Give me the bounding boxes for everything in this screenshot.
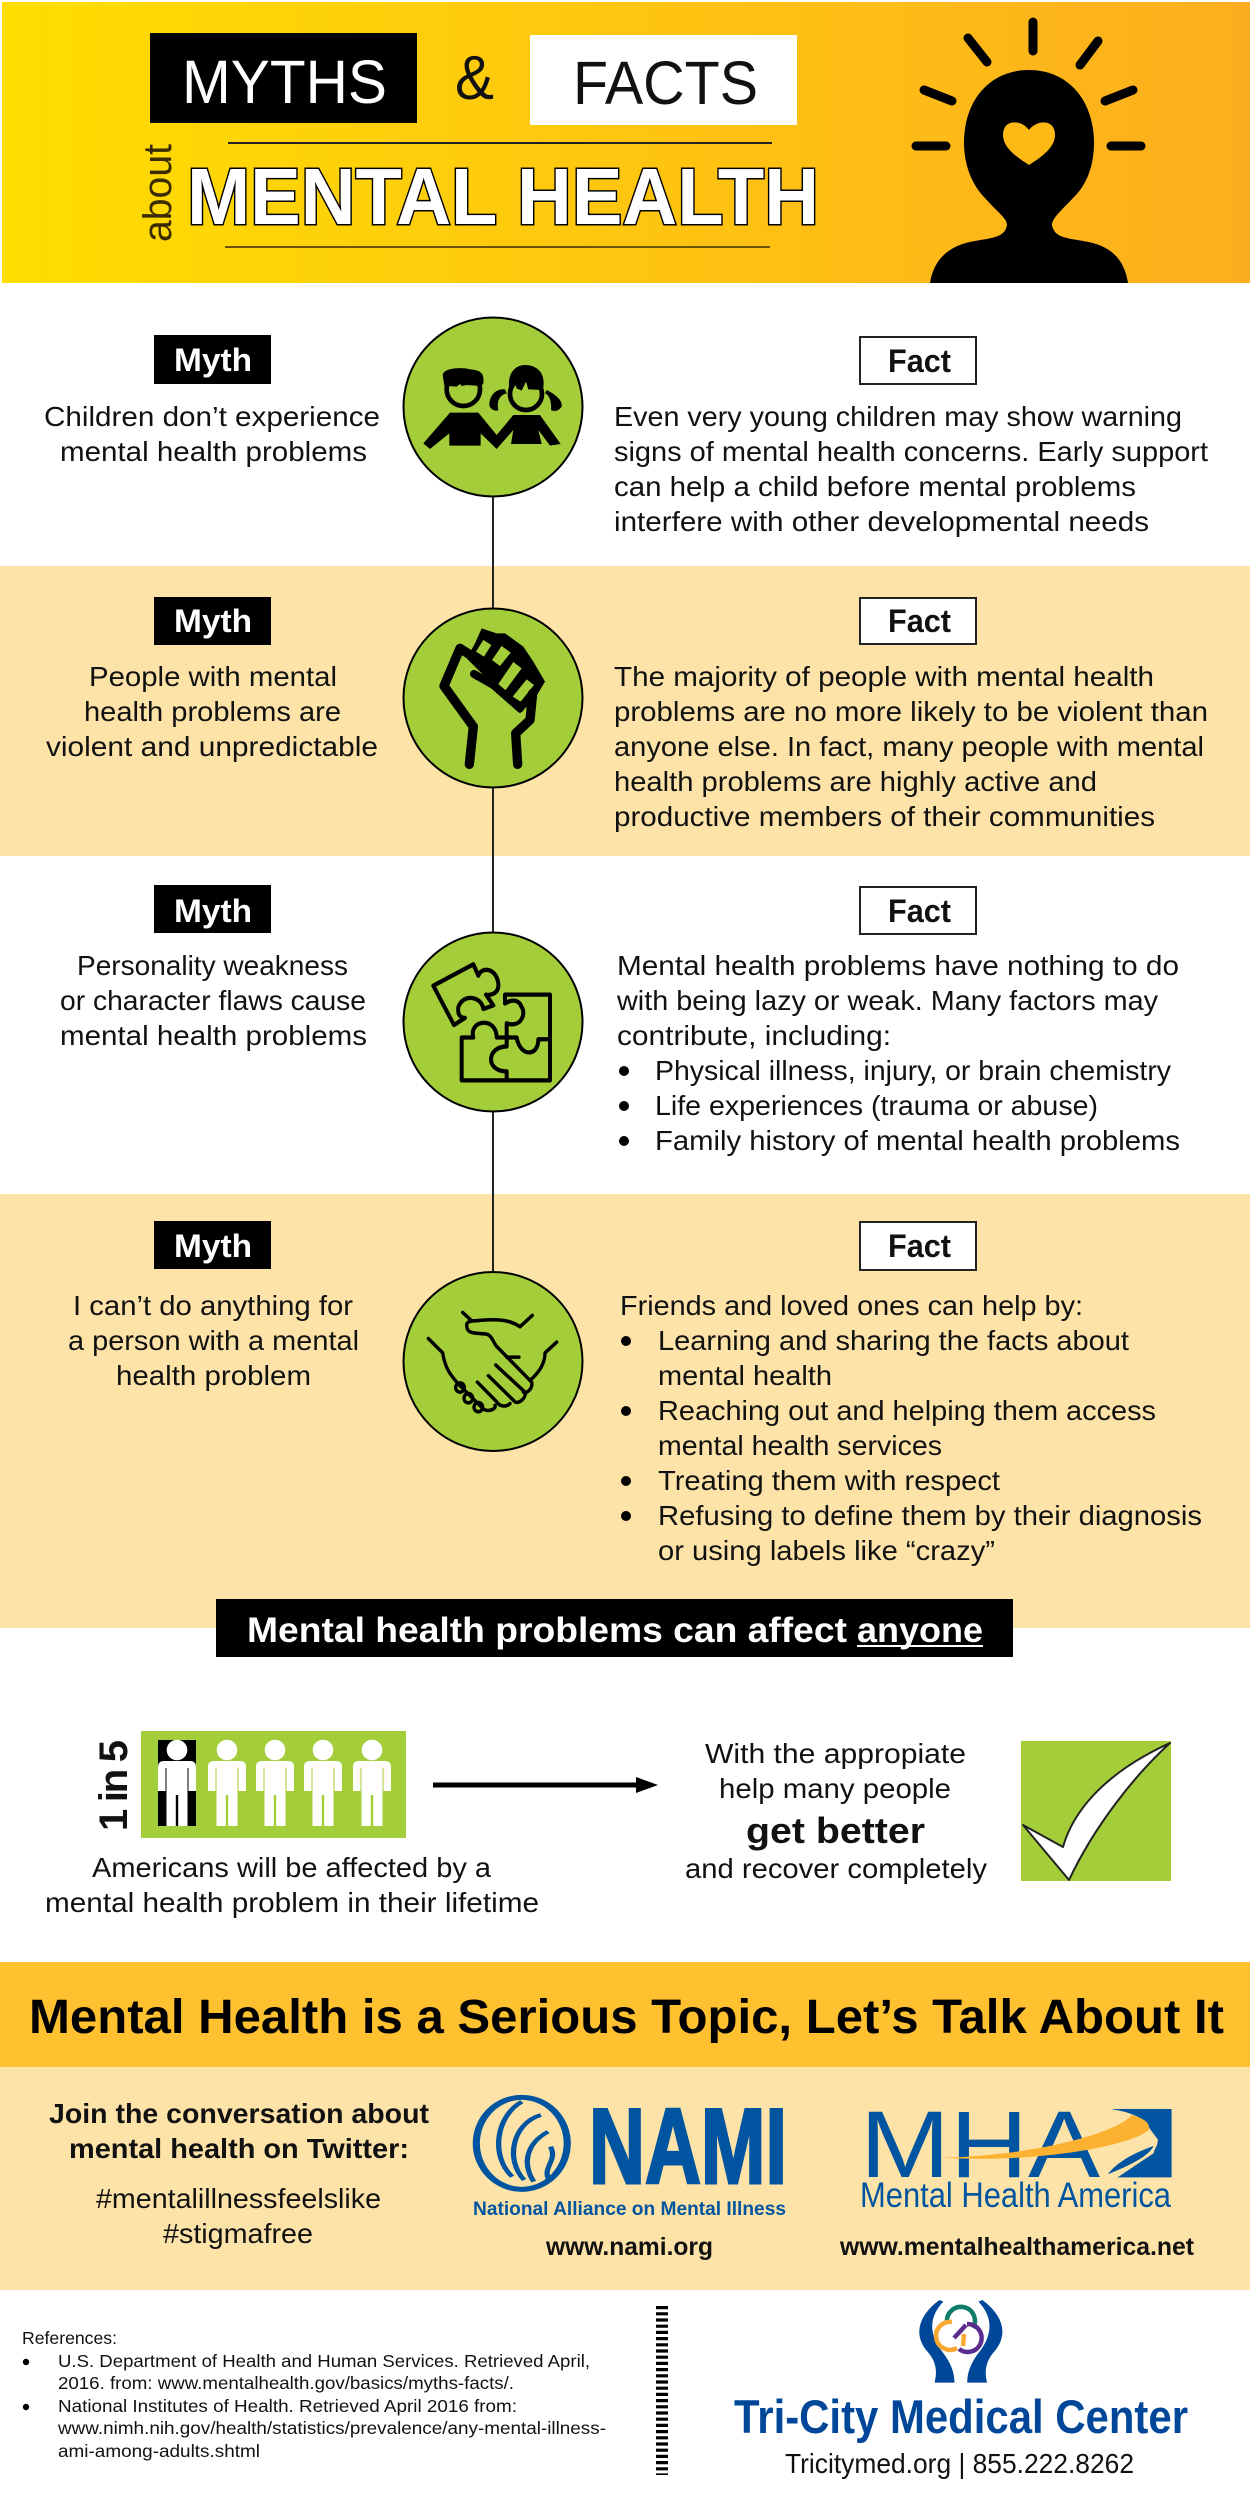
myth tag: Myth	[174, 893, 252, 929]
header panel	[2, 2, 1250, 283]
myths label	[150, 33, 417, 123]
myth text: violent and unpredictable	[46, 731, 378, 762]
myths label: MYTHS	[182, 48, 387, 116]
logo: MHA: MHA	[860, 2092, 1101, 2198]
fact text with bullets: Mental health problems have nothing to do	[617, 950, 1179, 981]
fact text: problems are no more likely to be violent than	[614, 696, 1208, 727]
myth tag	[154, 335, 271, 384]
fact tag	[860, 1222, 976, 1270]
twitter invite text: Join the conversation about	[49, 2098, 429, 2129]
fact text with bullets: with being lazy or weak. Many factors may	[616, 985, 1158, 1016]
myth text	[44, 401, 380, 467]
get better text: With the appropiate	[705, 1738, 966, 1769]
panel: join the conversation	[0, 2067, 1250, 2290]
logo: NAMI	[473, 2086, 787, 2220]
pictogram: 1 in 5 people	[141, 1731, 406, 1838]
hashtags: #mentalillnessfeelslike	[96, 2183, 381, 2214]
1 in 5 rotated label: 1 in 5	[92, 1740, 136, 1831]
fact tag: Fact	[888, 603, 951, 639]
americans caption	[45, 1852, 539, 1918]
fact text	[614, 661, 1208, 832]
timeline connector	[492, 497, 494, 1271]
fact tag	[860, 598, 976, 644]
section heading bar: Mental Health is a Serious Topic, Let’s Talk About It	[29, 1991, 1224, 2044]
myth text	[60, 950, 367, 1051]
panel: myth 2 violence	[0, 566, 1250, 856]
fact text: The majority of people with mental health	[614, 661, 1154, 692]
myth text: or character flaws cause	[60, 985, 366, 1016]
myth text	[68, 1290, 359, 1391]
panel: myth 1 children	[0, 283, 1250, 566]
dashed divider	[656, 2306, 668, 2475]
myth text: mental health problems	[60, 436, 367, 467]
myth text: I can’t do anything for	[73, 1290, 353, 1321]
icon: children	[404, 318, 582, 496]
myth text: health problem	[116, 1360, 311, 1391]
facts label: FACTS	[573, 49, 758, 117]
fact text with bullets	[620, 1290, 1202, 1566]
fact text with bullets	[616, 950, 1180, 1156]
icon: check mark	[1021, 1741, 1171, 1881]
logo: MHA: Mental Health America	[860, 2176, 1171, 2215]
icon: head with heart and rays	[916, 22, 1141, 283]
myth tag: Myth	[174, 342, 252, 378]
myth tag	[154, 885, 271, 933]
fact text	[614, 401, 1208, 537]
americans caption: mental health problem in their lifetime	[45, 1887, 539, 1918]
fact text: can help a child before mental problems	[614, 471, 1136, 502]
hashtags: #stigmafree	[163, 2218, 313, 2249]
fact text: Even very young children may show warning	[614, 401, 1182, 432]
fact text with bullets: Family history of mental health problems	[655, 1125, 1180, 1156]
fact tag: Fact	[888, 343, 951, 379]
myth text: mental health problems	[60, 1020, 367, 1051]
footer references: www.nimh.nih.gov/health/statistics/prevalence/any-mental-illness-	[57, 2418, 606, 2438]
logo: Tri-City Medical Center: Tri-City Medical Center	[734, 2390, 1188, 2443]
fact text: productive members of their communities	[614, 801, 1155, 832]
get better text: help many people	[719, 1773, 951, 1804]
fact text with bullets: Friends and loved ones can help by:	[620, 1290, 1083, 1321]
fact text with bullets: mental health	[658, 1360, 832, 1391]
myth text: People with mental	[89, 661, 337, 692]
footer references: National Institutes of Health. Retrieved April 2016 from:	[58, 2396, 517, 2416]
fact text with bullets: Treating them with respect	[658, 1465, 1000, 1496]
fact tag: Fact	[888, 893, 951, 929]
ampersand: &	[455, 44, 494, 113]
americans caption: Americans will be affected by a	[92, 1852, 491, 1883]
footer references: ami-among-adults.shtml	[58, 2441, 260, 2461]
fact text with bullets: Life experiences (trauma or abuse)	[655, 1090, 1098, 1121]
fact text with bullets: mental health services	[658, 1430, 942, 1461]
get better text: get better	[746, 1810, 925, 1851]
footer references	[22, 2328, 606, 2461]
fact text with bullets: Refusing to define them by their diagnosis	[658, 1500, 1202, 1531]
myth tag: Myth	[174, 1228, 252, 1264]
myth tag	[154, 1221, 271, 1269]
facts label	[530, 35, 797, 125]
fact text with bullets: contribute, including:	[617, 1020, 891, 1051]
fact text: anyone else. In fact, many people with mental	[614, 731, 1204, 762]
myth text: a person with a mental	[68, 1325, 359, 1356]
section heading bar	[0, 1962, 1250, 2067]
about rotated text: about	[136, 144, 180, 242]
fact text with bullets: or using labels like “crazy”	[658, 1535, 995, 1566]
footer references: U.S. Department of Health and Human Services. Retrieved April,	[58, 2351, 590, 2371]
get better text: and recover completely	[685, 1853, 987, 1884]
fact text: interfere with other developmental needs	[614, 506, 1149, 537]
myth text: Personality weakness	[77, 950, 348, 981]
myth text: Children don’t experience	[44, 401, 380, 432]
banner: can affect anyone	[216, 1599, 1013, 1657]
mha url: www.mentalhealthamerica.net	[839, 2233, 1195, 2261]
myth text	[46, 661, 378, 762]
panel: myth 3 personality	[0, 856, 1250, 1194]
logo: Tri-City Medical Center: Tricitymed.org | 855.222.8262	[785, 2448, 1134, 2479]
twitter invite text: mental health on Twitter:	[69, 2133, 409, 2164]
myth tag	[154, 597, 271, 645]
fact tag	[860, 887, 976, 934]
logo: Tri-City Medical Center	[734, 2300, 1188, 2479]
get better text	[685, 1738, 987, 1884]
logo: NAMI: NAMI	[589, 2086, 787, 2206]
arrow	[433, 1777, 658, 1793]
fact text with bullets: Reaching out and helping them access	[658, 1395, 1156, 1426]
fact text: health problems are highly active and	[614, 766, 1097, 797]
myth text: health problems are	[84, 696, 341, 727]
twitter invite text	[49, 2098, 429, 2164]
icon: handshake	[404, 1272, 582, 1451]
logo: MHA	[860, 2092, 1172, 2215]
fact tag	[860, 337, 976, 384]
logo: NAMI: National Alliance on Mental Illness	[473, 2199, 786, 2220]
fact text with bullets: Learning and sharing the facts about	[658, 1325, 1129, 1356]
footer references: 2016. from: www.mentalhealth.gov/basics/myths-facts/.	[58, 2373, 514, 2393]
fact text: signs of mental health concerns. Early support	[614, 436, 1208, 467]
icon: puzzle pieces	[404, 932, 582, 1112]
fact text with bullets: Physical illness, injury, or brain chemistry	[655, 1055, 1171, 1086]
fact tag: Fact	[888, 1228, 951, 1264]
footer references: References:	[22, 2328, 117, 2348]
banner: can affect anyone: anyone	[857, 1611, 983, 1650]
icon: raised fist	[404, 608, 582, 788]
title mental health: MENTAL HEALTH	[187, 152, 819, 241]
panel: myth 4 helping	[0, 1194, 1250, 1628]
hashtags	[96, 2183, 381, 2249]
banner: can affect anyone: Mental health problems can affect	[247, 1611, 847, 1650]
myth tag: Myth	[174, 603, 252, 639]
nami url: www.nami.org	[545, 2233, 713, 2261]
